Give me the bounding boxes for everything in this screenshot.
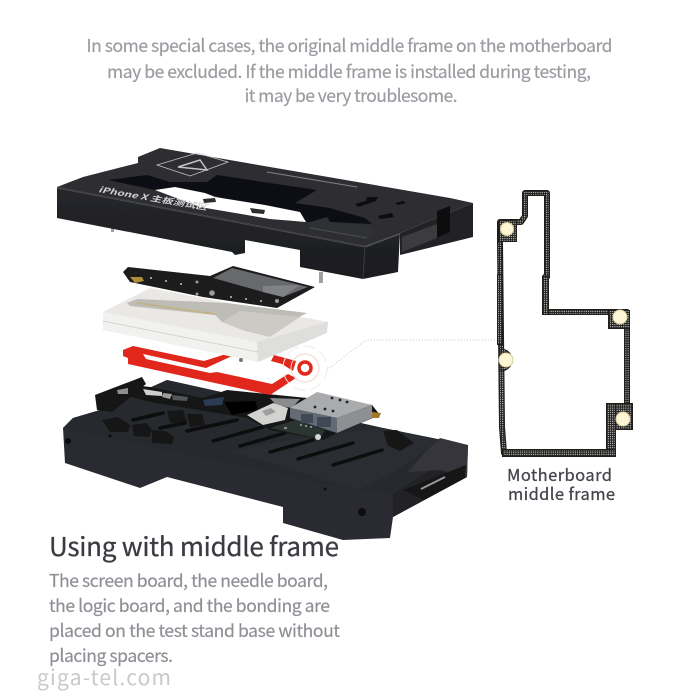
top cover frame [57,148,473,283]
description: placing spacers. [49,643,173,668]
needle pin [239,358,243,362]
cover right face [400,203,473,255]
intro paragraph: it may be very troublesome. [244,83,458,108]
black chip [224,401,258,415]
motherboard middle frame caption [507,462,615,505]
right frame piece [271,355,296,371]
base raised plate [227,428,440,490]
cover opening white [155,187,306,222]
lower pcb [270,420,325,439]
board connector gold tab [372,412,381,418]
thick sections and corner tabs [498,220,632,456]
cover fine print [267,172,357,187]
red frame body [123,346,296,395]
cover raised pad [307,217,375,238]
screen logic board [123,266,315,308]
target rings [283,346,327,390]
base slots [133,413,382,465]
cover model label: iPhone X 主板测试区 [98,184,211,214]
sim tray slots [301,414,331,427]
base right face [393,445,468,517]
white needle board [103,288,328,362]
intro paragraph: In some special cases, the original middle frame on the motherboard [86,33,612,58]
cover pin [319,272,323,283]
motherboard middle frame caption: Motherboard [507,462,612,486]
needle board edge lines [103,321,258,352]
needle board top [103,288,328,343]
motherboard middle frame diagram [498,193,632,456]
description: The screen board, the needle board, [49,568,328,593]
sim tray holes [314,397,348,412]
description: the logic board, and the bonding are [49,593,330,618]
board components [150,277,279,303]
pcb strip [117,385,380,440]
cover small slots [355,197,406,219]
base full silhouette [63,380,467,540]
cover tabs in opening [203,198,216,203]
cover front edge highlight [57,188,365,247]
intro paragraph: may be excluded. If the middle frame is installed during testing, [107,59,591,84]
sim tray front [290,408,337,433]
blue chips [203,397,224,406]
cover logo [157,153,228,176]
test stand base [63,377,468,540]
intro paragraph [86,33,612,108]
description: placed on the test stand base without [49,618,340,643]
description [49,568,340,668]
base translucent end block [408,438,468,477]
sim tray top [290,392,372,418]
cover front face [57,187,400,279]
base raised blocks [95,377,414,451]
needle board front [103,312,258,362]
sim tray side [337,405,372,433]
white shield [247,403,288,425]
logic board on base [117,385,381,440]
frame dots [500,193,627,453]
cover recess dark [108,175,372,224]
needle board recess [127,299,307,328]
red middle frame [123,346,327,395]
watermark: giga-tel.com [37,662,171,692]
board gold tab [130,277,144,283]
dotted callout line [327,340,498,370]
needle board side [257,322,328,362]
frame outline [500,193,627,453]
base label plate [403,465,466,500]
base screw holes [65,434,366,516]
motherboard middle frame caption: middle frame [508,481,615,505]
mounting holes [499,222,630,426]
cover top surface [57,148,473,246]
board silver shield [213,268,308,297]
heading: Using with middle frame [49,527,339,564]
board pcb [123,266,315,308]
right top shield [270,398,300,408]
base top surface [63,380,467,494]
left silver parts [117,388,128,394]
